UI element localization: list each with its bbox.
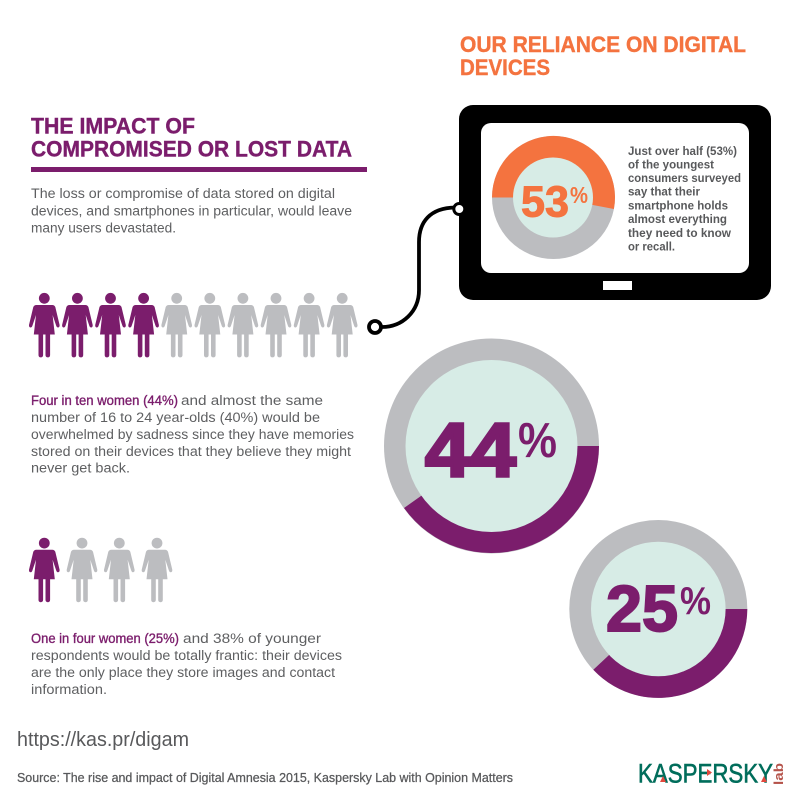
text block: one in four women — [31, 631, 342, 697]
text block: four in ten women: never get back. — [31, 460, 130, 476]
pictogram: four in ten women — [29, 293, 358, 357]
arrow: connector from pictogram to tablet — [369, 204, 465, 333]
tablet text: smartphone holds — [628, 200, 728, 212]
heading: the impact of compromised or lost data — [31, 113, 367, 172]
donut chart: 44% — [384, 338, 599, 554]
text block: one in four women: are the only place they store images and contact — [31, 665, 335, 680]
heading: the impact of compromised or lost data: COMPROMISED OR LOST DATA — [31, 137, 352, 162]
text block: one in four women: and 38% of younger — [183, 631, 322, 646]
text block: four in ten women: number of 16 to 24 year-olds (40%) would be — [31, 410, 320, 425]
intro text — [31, 186, 352, 235]
text block: one in four women: One in four women (25%) — [31, 631, 179, 646]
tablet text: or recall. — [628, 242, 675, 254]
intro text: devices, and smartphones in particular, would leave — [31, 203, 352, 218]
tablet text: consumers surveyed — [628, 173, 741, 185]
heading: our reliance on digital devices: OUR RELIANCE ON DIGITAL — [460, 32, 746, 57]
source: Source: The rise and impact of Digital Amnesia 2015, Kaspersky Lab with Opinion Matters — [17, 771, 513, 785]
logo: kaspersky lab: lab — [771, 763, 786, 785]
text block: one in four women: information. — [31, 682, 107, 697]
tablet text: say that their — [628, 187, 701, 199]
panel: tablet — [459, 105, 771, 300]
text block: four in ten women: overwhelmed by sadness since they have memories — [31, 427, 354, 442]
donut chart: 25%: 25 — [606, 572, 678, 645]
tablet button — [603, 281, 632, 290]
heading: our reliance on digital devices — [460, 32, 746, 80]
donut chart: 53% — [492, 136, 615, 259]
text block: four in ten women: Four in ten women (44%) — [31, 393, 178, 408]
tablet text: they need to know — [628, 228, 731, 240]
tablet text — [628, 146, 741, 254]
donut chart: 53%: % — [570, 182, 588, 208]
intro text: The loss or compromise of data stored on digital — [31, 186, 335, 201]
heading: the impact of compromised or lost data: THE IMPACT OF — [31, 113, 195, 138]
donut chart: 25%: % — [680, 580, 711, 623]
text block: four in ten women: and almost the same — [181, 393, 323, 408]
text block: four in ten women: stored on their devices that they believe they might — [31, 444, 351, 459]
donut chart: 44%: 44 — [425, 408, 516, 493]
text block: four in ten women — [31, 393, 354, 476]
tablet text: Just over half (53%) — [628, 146, 737, 158]
donut chart: 25% — [569, 520, 747, 698]
donut chart: 44%: % — [518, 414, 557, 468]
text block: one in four women: respondents would be totally frantic: their devices — [31, 648, 342, 663]
url: https://kas.pr/digam — [17, 729, 189, 751]
heading: our reliance on digital devices: DEVICES — [460, 55, 550, 80]
tablet text: of the youngest — [628, 160, 714, 172]
pictogram: one in four women — [29, 538, 172, 602]
tablet screen — [481, 123, 749, 273]
tablet text: almost everything — [628, 214, 727, 226]
intro text: many users devastated. — [31, 220, 176, 235]
logo: kaspersky lab: KASPERSKY — [638, 758, 773, 788]
donut chart: 53%: 53 — [521, 178, 569, 226]
